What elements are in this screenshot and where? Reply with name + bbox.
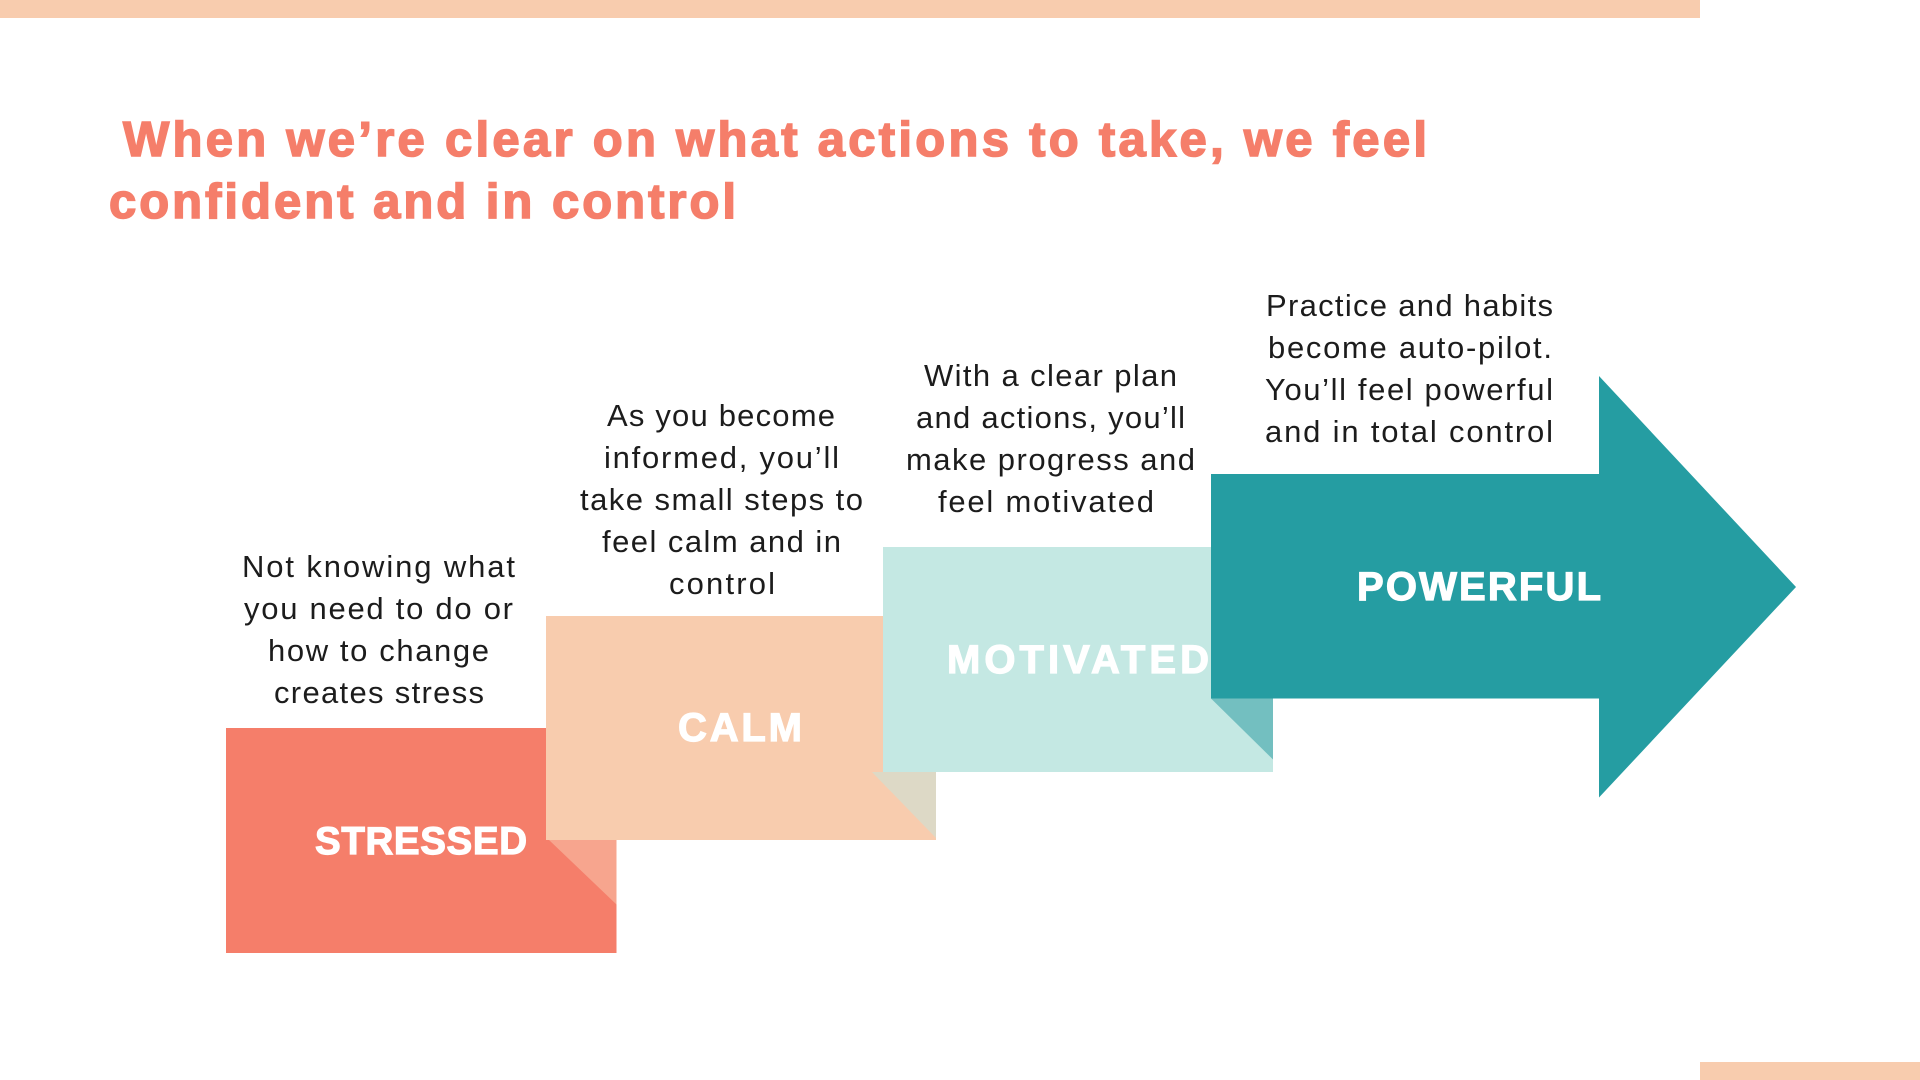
top accent bar xyxy=(0,0,1700,18)
title: When we’re clear on what actions to take, we feel xyxy=(123,113,1427,167)
fold: calm xyxy=(872,772,936,838)
label: motivated: MOTIVATED xyxy=(947,638,1209,682)
title: confident and in control xyxy=(109,175,736,229)
label: powerful: POWERFUL xyxy=(1357,565,1601,609)
text: powerful description: and in total control xyxy=(1265,414,1553,449)
label: calm: CALM xyxy=(678,706,802,750)
text: calm description: informed, you’ll xyxy=(604,440,839,475)
fold: stressed xyxy=(549,840,616,904)
step: motivated xyxy=(883,547,1273,772)
text: powerful description: become auto-pilot. xyxy=(1268,330,1552,365)
step: stressed xyxy=(226,728,616,953)
text: powerful description xyxy=(1265,288,1553,449)
text: stressed description: creates stress xyxy=(274,675,484,710)
text: stressed description xyxy=(242,549,515,710)
fold: motivated xyxy=(1211,698,1273,760)
bottom accent bar xyxy=(1700,1062,1920,1080)
text: calm description: As you become xyxy=(607,398,835,433)
text: powerful description: You’ll feel powerful xyxy=(1265,372,1553,407)
step: powerful arrow xyxy=(1211,376,1796,798)
text: calm description: feel calm and in xyxy=(602,524,841,559)
step: calm xyxy=(546,616,936,840)
text: calm description xyxy=(580,398,863,601)
text: calm description: take small steps to xyxy=(580,482,863,517)
text: stressed description: you need to do or xyxy=(244,591,513,626)
text: calm description: control xyxy=(669,566,775,601)
text: motivated description: With a clear plan xyxy=(924,358,1177,393)
text: motivated description: feel motivated xyxy=(938,484,1154,519)
text: motivated description: make progress and xyxy=(906,442,1195,477)
text: motivated description: and actions, you’ll xyxy=(916,400,1185,435)
text: stressed description: how to change xyxy=(268,633,489,668)
text: motivated description xyxy=(906,358,1195,519)
text: stressed description: Not knowing what xyxy=(242,549,515,584)
text: powerful description: Practice and habits xyxy=(1266,288,1553,323)
title xyxy=(109,113,1427,229)
label: stressed: STRESSED xyxy=(315,820,527,863)
